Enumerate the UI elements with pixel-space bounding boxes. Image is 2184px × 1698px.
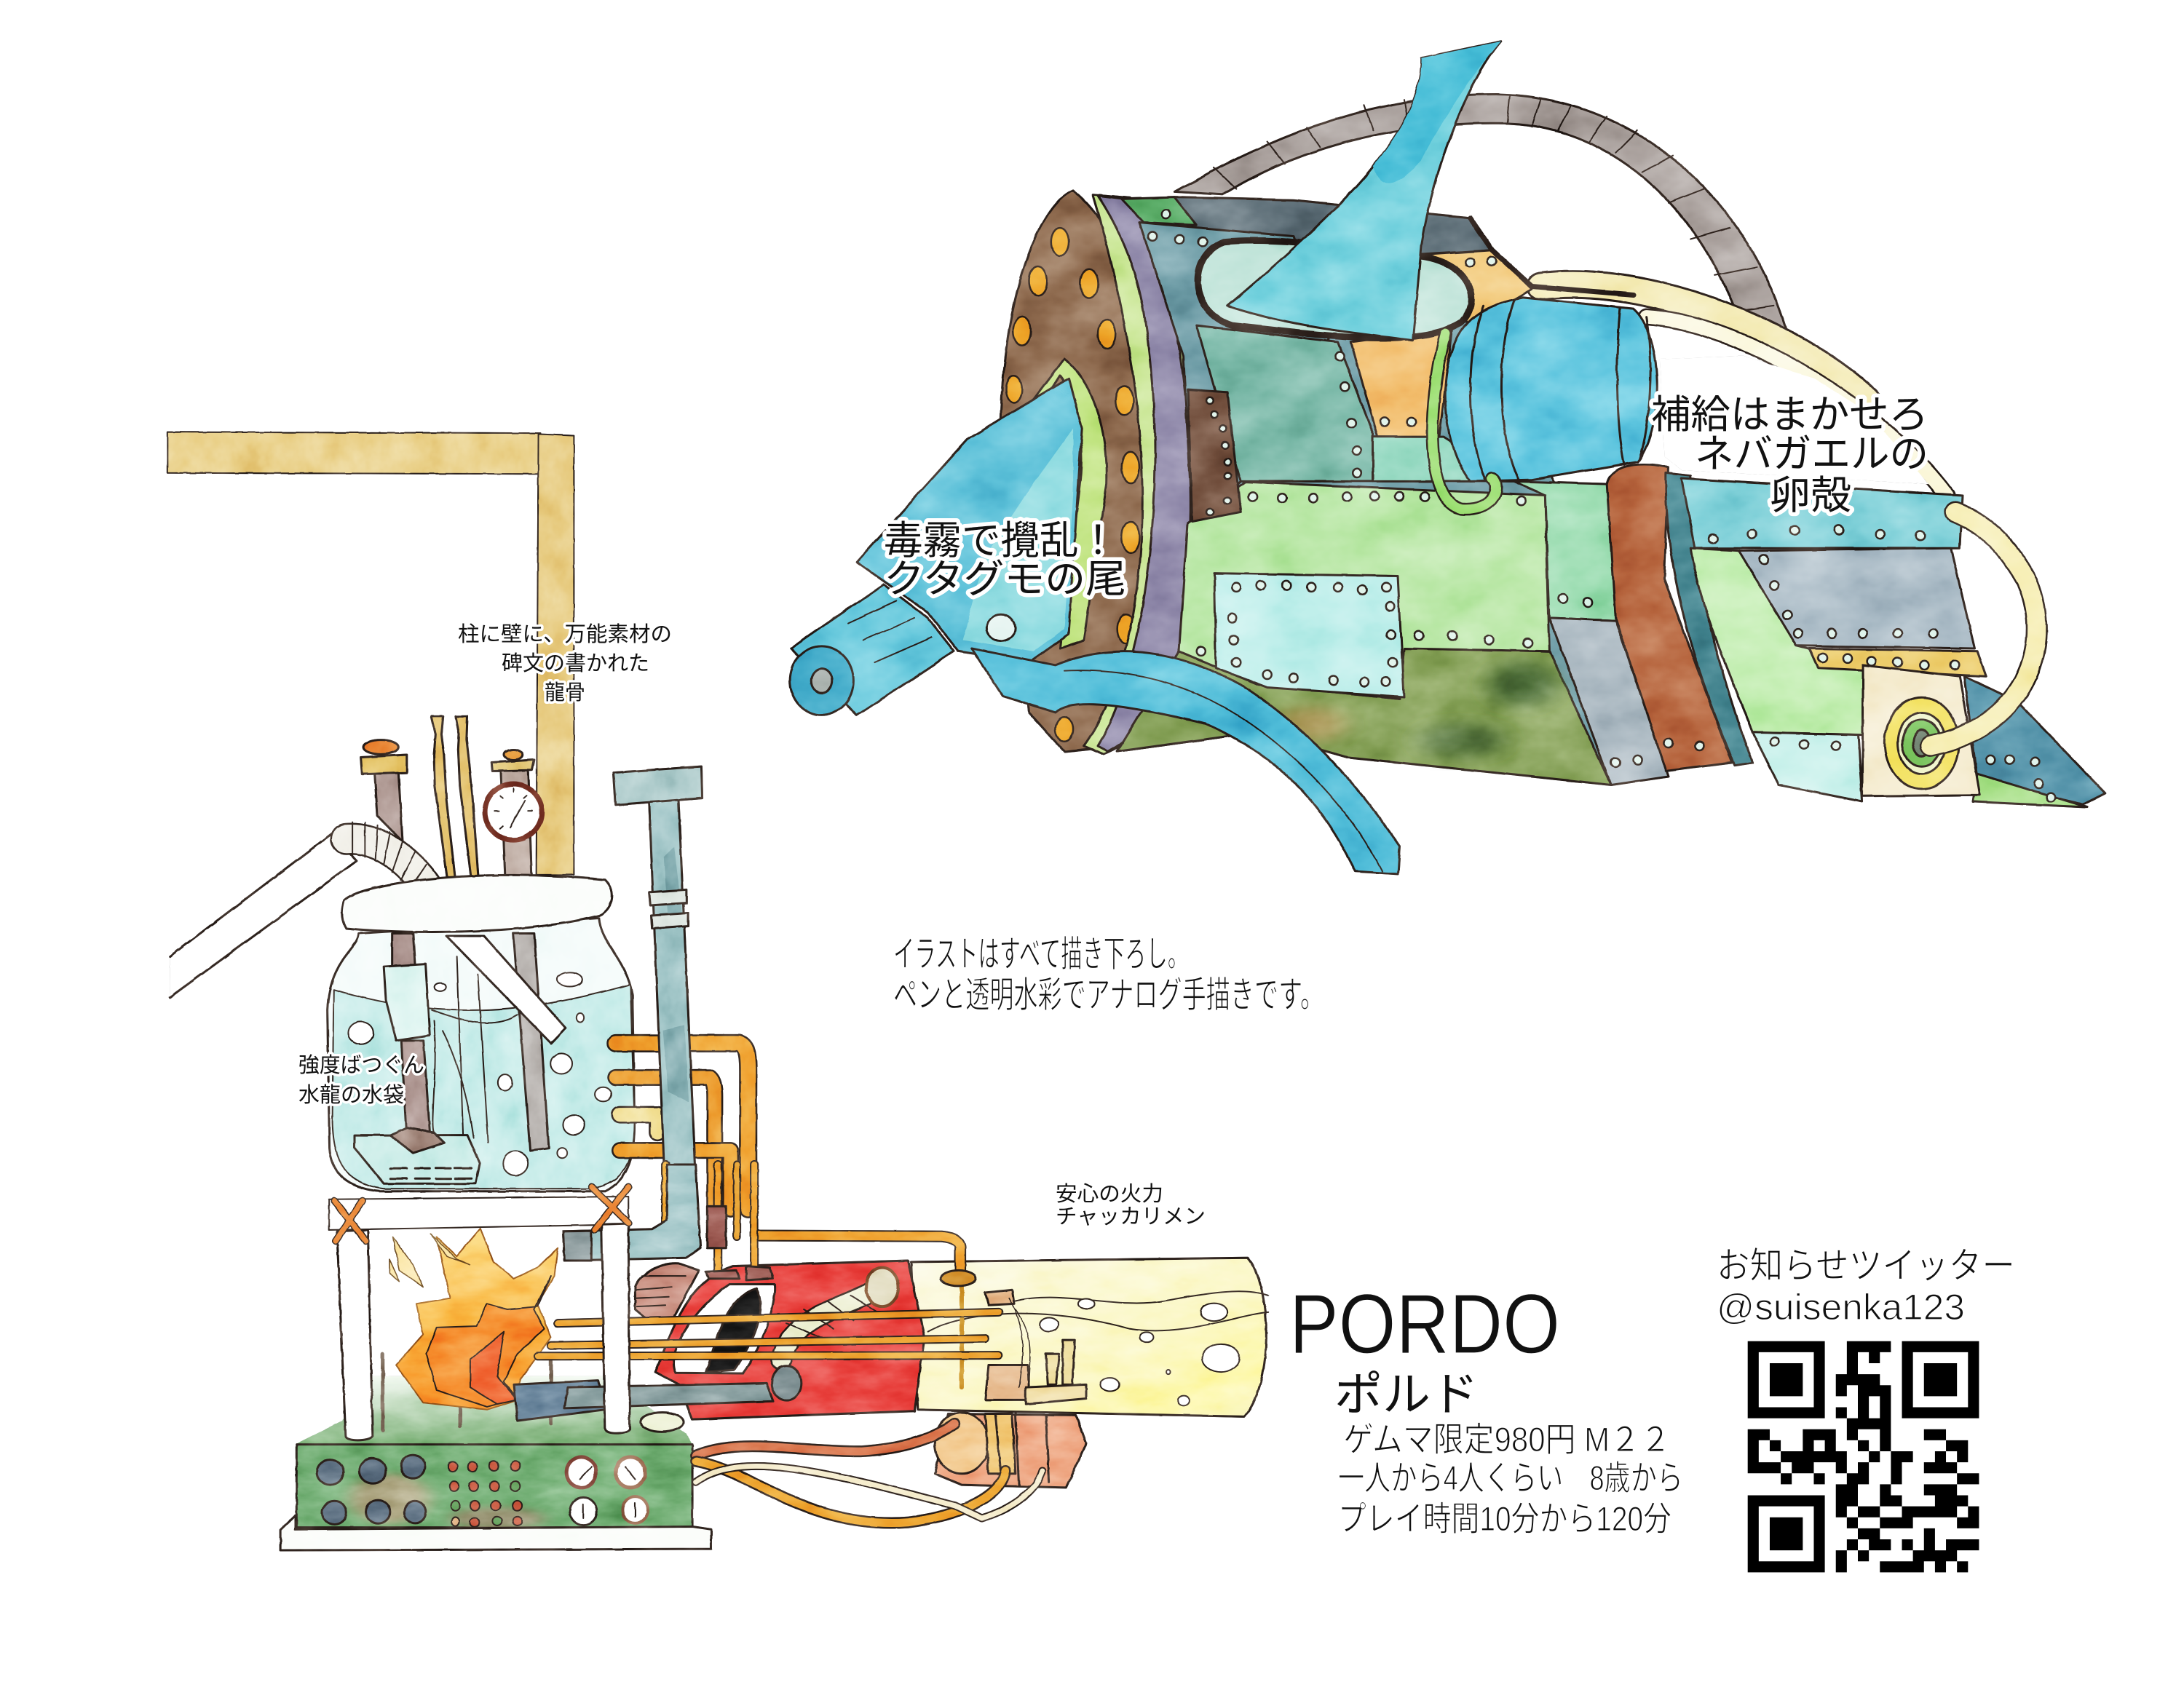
- rods inside jar: [392, 934, 549, 1151]
- blue-grey and teal panels: [1139, 223, 1514, 523]
- callout: poison mist: 毒霧で攪乱！: [884, 519, 1117, 563]
- lump under chamber: [641, 1413, 684, 1432]
- note on hand-drawn illustration: ペンと透明水彩でアナログ手描きです。: [893, 975, 1324, 1015]
- blue intake cylinder: [1445, 298, 1928, 484]
- grey ribbed hose: [1174, 94, 1788, 348]
- pale riveted patch: [1214, 574, 1404, 697]
- accordion duct in chamber: [773, 1268, 898, 1360]
- callout: poison mist: [884, 519, 1126, 601]
- purple and grey collar ring: [1084, 194, 1198, 754]
- vertical pipes from above: [665, 1165, 754, 1270]
- dials: [566, 1457, 648, 1526]
- orange pipe to tube: [760, 1236, 976, 1387]
- callout: dragon bone: 柱に壁に、万能素材の: [458, 622, 672, 646]
- ribbed pink bellows behind: [635, 1263, 699, 1323]
- orange corner straps: [334, 1187, 628, 1241]
- callout: dragon bone: [458, 622, 672, 705]
- table shelf: [329, 1197, 628, 1230]
- small apparatus in tube: [985, 1290, 1086, 1404]
- pressure gauge on rod: [485, 750, 542, 892]
- callout: water bag: [298, 1053, 424, 1107]
- base of body behind panels: [1117, 211, 1611, 779]
- twin carved sticks: [432, 716, 479, 892]
- cream looping hose: [1931, 512, 2037, 746]
- callout: flame: [1056, 1182, 1206, 1229]
- burner tube: [514, 1366, 802, 1421]
- callout: flame: チャッカリメン: [1056, 1205, 1206, 1229]
- oval window and rim: [1198, 218, 1634, 338]
- indicator lights: [448, 1461, 522, 1527]
- callout: water bag: 強度ばつぐん: [298, 1053, 424, 1077]
- grey and rust strips: [1549, 464, 1732, 785]
- orange panels: [1351, 250, 1532, 437]
- note on hand-drawn illustration: イラストはすべて描き下ろし。: [893, 934, 1189, 975]
- game details: ゲムマ限定980円 M２２: [1343, 1420, 1671, 1459]
- mottled olive lower panel: [1117, 648, 1611, 785]
- flame: [389, 1229, 558, 1410]
- twitter announcement: お知らせツイッター: [1717, 1245, 2015, 1286]
- game details: [1338, 1420, 1683, 1538]
- callout: dragon bone: 龍骨: [545, 681, 585, 705]
- wooden post: [537, 434, 574, 875]
- title: PORDO: [1289, 1277, 1560, 1371]
- callout: gauntlet supply: [1651, 393, 1928, 517]
- table legs: [337, 1223, 630, 1440]
- support struts behind flame: [383, 1354, 551, 1430]
- callout: dragon bone: 碑文の書かれた: [502, 651, 649, 675]
- dark brown riveted patch: [1188, 389, 1241, 521]
- blue spider-tail spout: [857, 378, 1082, 662]
- illustration: burner table, flame, red chamber and yellow tube: [280, 1165, 1268, 1550]
- spout nozzle tip: [790, 584, 954, 715]
- jar: [328, 919, 635, 1191]
- callout: flame: 安心の火力: [1056, 1182, 1163, 1206]
- valves and connectors: [706, 1206, 773, 1280]
- red chamber: [655, 1261, 925, 1419]
- grey elbow pipe: [563, 1165, 700, 1261]
- green frame around spout: [1024, 359, 1107, 648]
- dark upper panels: [1122, 197, 1492, 255]
- game details: 一人から4人くらい 8歳から: [1338, 1459, 1683, 1497]
- white water bag: [384, 964, 430, 1041]
- control box: [296, 1445, 692, 1529]
- note on hand-drawn illustration: [893, 934, 1324, 1015]
- illustration: patchwork sprayer gauntlet: [790, 41, 2105, 874]
- submerged device: [355, 1127, 480, 1183]
- capped rod left: [361, 740, 407, 841]
- illustration: wood frame, water jar and pipes: [167, 432, 748, 1209]
- white base plate: [280, 1515, 711, 1550]
- cream square with target rings: [1863, 665, 1980, 796]
- twitter announcement: @suisenka123: [1717, 1287, 1965, 1328]
- upper blue fin: [1227, 41, 1501, 341]
- copper motor: [935, 1413, 1086, 1488]
- green U-ring: [1433, 334, 1496, 509]
- bubbles: [348, 972, 612, 1175]
- accordion joint: [347, 822, 434, 897]
- light green main panel: [1179, 481, 1615, 699]
- orange pipes: [616, 1043, 748, 1209]
- wooden beam: [167, 432, 540, 474]
- cream supply hoses: [1540, 285, 1947, 496]
- lid disc: [342, 875, 612, 932]
- pale green backdrop behind flame: [295, 1376, 692, 1445]
- QR code: [1748, 1341, 1979, 1572]
- callout: gauntlet supply: 補給はまかせろ: [1651, 393, 1928, 437]
- game details: プレイ時間10分から120分: [1338, 1499, 1671, 1538]
- rivets: [1148, 210, 2055, 801]
- rear rust-brown plate with orange studs: [1001, 191, 1163, 752]
- big curved blue tail: [972, 648, 1399, 874]
- wires to motor: [696, 1424, 1042, 1523]
- callout: gauntlet supply: ネバガエルの: [1695, 432, 1928, 476]
- wires in jar: [432, 956, 518, 1143]
- orange rods: [537, 1312, 999, 1356]
- callout: gauntlet supply: 卵殻: [1770, 474, 1851, 517]
- white pipe: [170, 834, 357, 997]
- blue-grey T pipe: [614, 766, 703, 1209]
- twitter announcement: [1717, 1245, 2015, 1328]
- knobs: [317, 1455, 426, 1524]
- diagonal lid strut: [446, 936, 566, 1043]
- callout: water bag: 水龍の水袋: [298, 1083, 404, 1107]
- callout: poison mist: クタグモの尾: [884, 558, 1126, 601]
- title kana: ポルド: [1334, 1368, 1479, 1421]
- yellow glass tube: [911, 1258, 1268, 1416]
- layered rear section: [1666, 473, 2105, 807]
